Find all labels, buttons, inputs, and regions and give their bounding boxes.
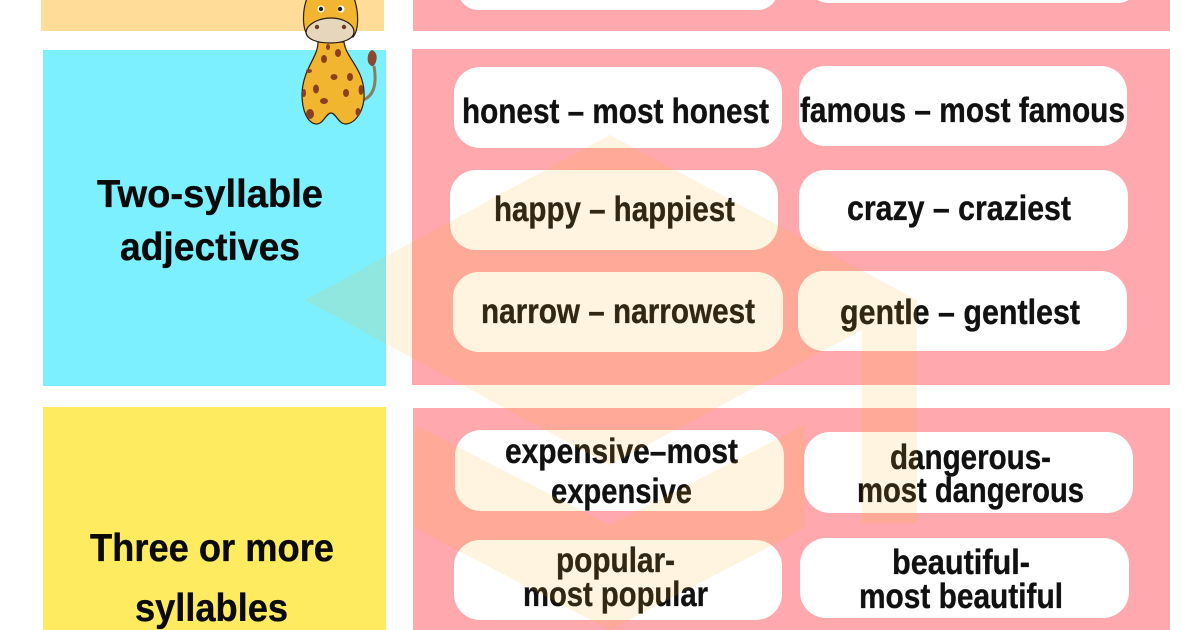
- heading: three or more syllables: syllables: [135, 587, 288, 630]
- example: gentle: gentle – gentlest: [840, 293, 1080, 332]
- giraffe muzzle: [306, 18, 354, 43]
- heading: three or more syllables: Three or more: [90, 527, 334, 570]
- heading: two-syllable adjectives: Two-syllable: [97, 173, 323, 216]
- giraffe spots: [302, 44, 364, 119]
- example: popular: popular-: [556, 541, 675, 580]
- panel: two-syllable examples: [412, 49, 1170, 385]
- watermark: graduation cap: [305, 135, 917, 630]
- example: popular: most popular: [523, 575, 708, 614]
- example: happy: happy – happiest: [494, 190, 735, 229]
- example: beautiful: most beautiful: [859, 577, 1063, 616]
- example: dangerous: [804, 432, 1133, 513]
- panel: three or more syllables examples: [413, 408, 1170, 630]
- example: honest: honest – most honest: [462, 92, 769, 131]
- example: narrow: narrow – narrowest: [481, 292, 755, 331]
- panel: top examples strip: [413, 0, 1170, 31]
- example: honest: [454, 67, 782, 148]
- example: beautiful: beautiful-: [892, 543, 1030, 582]
- heading: two-syllable adjectives: adjectives: [120, 226, 300, 269]
- panel: three or more syllables label: [43, 407, 386, 630]
- example: expensive: expensive: [551, 472, 692, 511]
- example: famous: famous – most famous: [800, 91, 1125, 130]
- example: popular: [454, 540, 782, 620]
- example: crazy: [799, 170, 1128, 251]
- heading: two-syllable adjectives: [97, 173, 323, 269]
- giraffe head: [303, 0, 358, 37]
- giraffe body: [302, 42, 364, 124]
- heading: three or more syllables: [90, 527, 334, 630]
- example: happy: [450, 170, 778, 250]
- example: dangerous: dangerous-: [890, 438, 1051, 477]
- example: beautiful: [800, 538, 1129, 618]
- example: expensive: [455, 430, 784, 511]
- example: narrow: [453, 272, 783, 352]
- panel: two-syllable label: [43, 50, 386, 386]
- giraffe eyes: [318, 6, 344, 12]
- example: dangerous: most dangerous: [857, 471, 1084, 510]
- icon: giraffe: [302, 0, 377, 124]
- example: crazy: crazy – craziest: [847, 189, 1071, 228]
- giraffe nostrils: [315, 25, 346, 29]
- giraffe tail: [363, 50, 377, 100]
- example: famous: [799, 66, 1127, 146]
- example: expensive: expensive–most: [505, 432, 738, 471]
- example: gentle: [798, 271, 1127, 351]
- panel: top label strip: [41, 0, 384, 31]
